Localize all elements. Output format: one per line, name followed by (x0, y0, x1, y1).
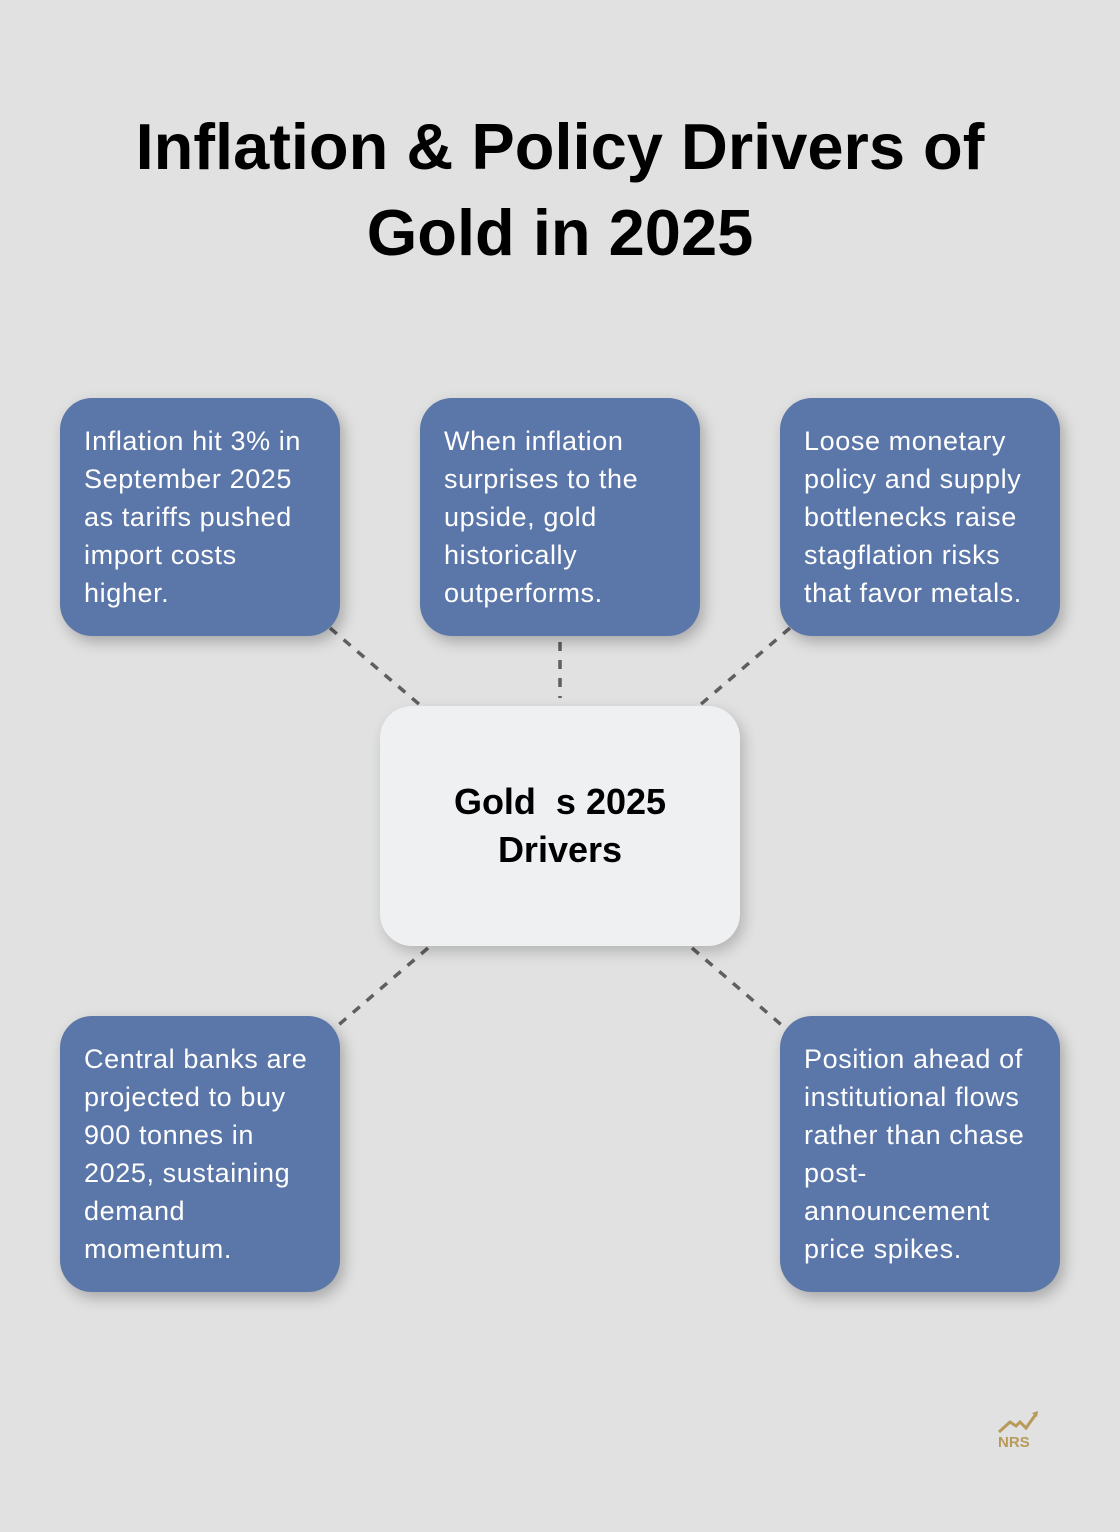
box: loose policy: policy and supply (804, 464, 1021, 494)
box: position ahead: institutional flows (804, 1082, 1020, 1112)
center box (380, 706, 740, 946)
box: inflation surprises: upside, gold (444, 502, 597, 532)
box: central banks: 900 tonnes in (84, 1120, 254, 1150)
box: inflation 3%: Inflation hit 3% in (84, 426, 301, 456)
box: loose policy: Loose monetary (804, 426, 1006, 456)
logo (998, 1411, 1038, 1450)
box: central banks: Central banks are (84, 1044, 307, 1074)
box: inflation 3%: as tariffs pushed (84, 502, 292, 532)
box: inflation 3%: import costs (84, 540, 237, 570)
title (136, 110, 985, 269)
box: inflation surprises (420, 398, 700, 636)
box: inflation surprises: When inflation (444, 426, 624, 456)
box: central banks: demand (84, 1196, 185, 1226)
box: inflation 3% (60, 398, 340, 636)
title: Gold in 2025 (367, 196, 753, 269)
box: position ahead (780, 1016, 1060, 1292)
box: inflation surprises: outperforms. (444, 578, 603, 608)
box: position ahead: price spikes. (804, 1234, 962, 1264)
box: loose policy: bottlenecks raise (804, 502, 1017, 532)
box: loose policy: that favor metals. (804, 578, 1022, 608)
box: inflation surprises: surprises to the (444, 464, 638, 494)
box: central banks (60, 1016, 340, 1292)
box: central banks: 2025, sustaining (84, 1158, 290, 1188)
box: inflation surprises: historically (444, 540, 577, 570)
box: loose policy (780, 398, 1060, 636)
title: Inflation & Policy Drivers of (136, 110, 984, 183)
box: loose policy: stagflation risks (804, 540, 1000, 570)
box: central banks: momentum. (84, 1234, 232, 1264)
center box: Gold s 2025 (454, 781, 666, 822)
box: position ahead: announcement (804, 1196, 990, 1226)
center box: Drivers (498, 829, 622, 870)
box: central banks: projected to buy (84, 1082, 286, 1112)
box: position ahead: rather than chase (804, 1120, 1024, 1150)
box: inflation 3%: higher. (84, 578, 169, 608)
box: inflation 3%: September 2025 (84, 464, 292, 494)
box: position ahead: post- (804, 1158, 867, 1188)
box: position ahead: Position ahead of (804, 1044, 1023, 1074)
